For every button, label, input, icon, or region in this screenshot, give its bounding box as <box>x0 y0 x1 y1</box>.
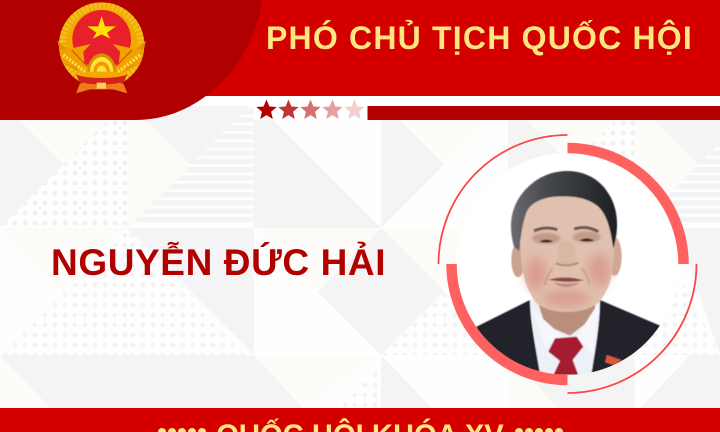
eyes <box>539 240 553 243</box>
collar left <box>542 318 554 330</box>
nose <box>556 263 578 265</box>
lapel pin <box>605 355 622 365</box>
name heading: NGUYỄN ĐỨC HẢI <box>51 242 386 283</box>
portrait photo <box>456 153 678 378</box>
brows <box>534 228 557 231</box>
footer dots left <box>158 428 206 432</box>
right accent bar <box>368 106 720 120</box>
right ear <box>612 237 622 276</box>
collar right <box>584 308 596 325</box>
dark red corner shape <box>0 0 262 120</box>
shirt <box>529 300 600 378</box>
footer dots right <box>515 428 563 432</box>
white strip <box>0 96 720 106</box>
suit left <box>477 300 541 378</box>
top band <box>0 0 720 96</box>
left ear <box>511 243 525 277</box>
suit right <box>591 300 660 378</box>
mouth <box>548 277 584 282</box>
cheeks <box>525 253 610 307</box>
neck <box>538 304 596 336</box>
tie <box>548 337 583 375</box>
ring: thin arcs <box>438 135 696 393</box>
icon: national emblem <box>57 2 146 93</box>
title: PHÓ CHỦ TỊCH QUỐC HỘI <box>266 20 693 56</box>
nasolabial folds <box>545 268 589 285</box>
ring: thick arcs <box>452 148 684 380</box>
bottom band <box>0 408 720 432</box>
star backing <box>254 106 368 120</box>
icon: star rating <box>256 100 365 119</box>
eye sockets <box>532 231 601 265</box>
hair <box>511 171 617 251</box>
face <box>520 188 614 312</box>
background pattern <box>0 101 720 408</box>
